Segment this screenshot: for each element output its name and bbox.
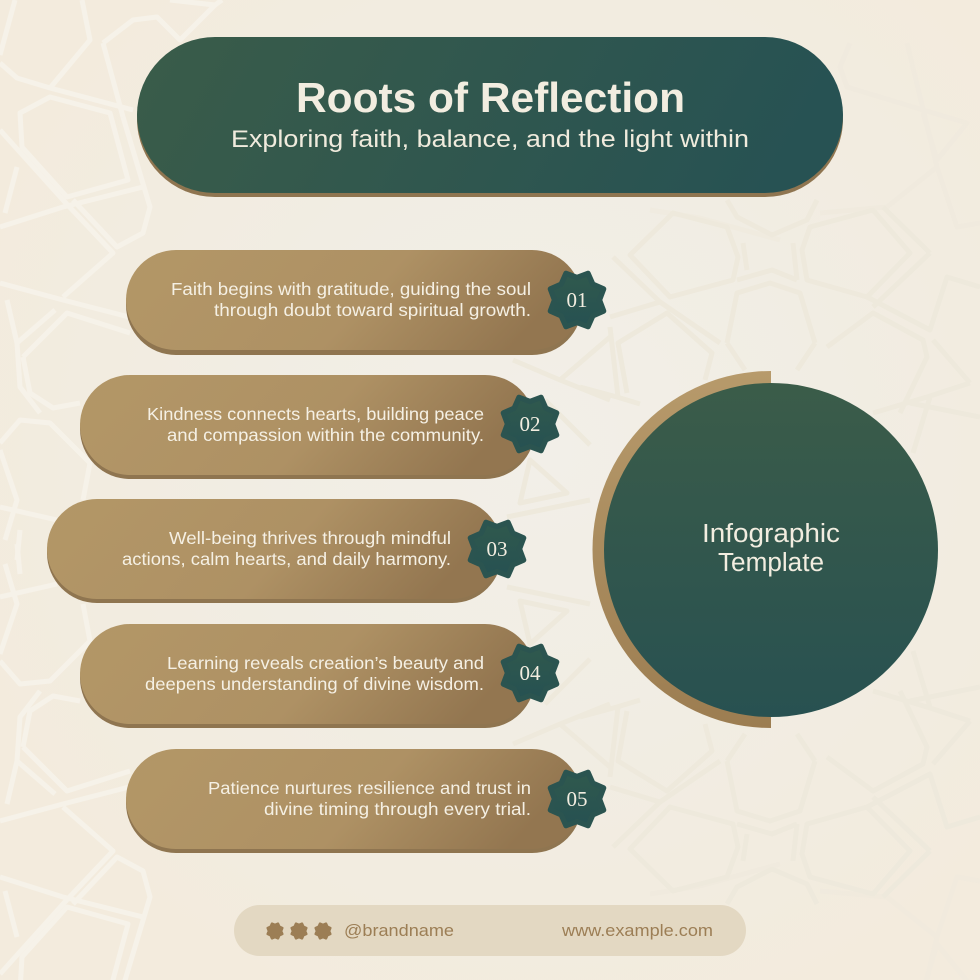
panel: item 01 [126, 250, 604, 355]
circle label: Template [718, 549, 824, 577]
text: item 03: actions, calm hearts, and daily harmony. [122, 549, 451, 569]
badge: 05 [550, 772, 604, 826]
subtitle: Exploring faith, balance, and the light within [231, 126, 749, 153]
circle label: Infographic [702, 520, 840, 548]
text: item 05: Patience nurtures resilience and trust in [208, 778, 531, 798]
panel: item 04 [80, 624, 557, 728]
badge: 05: 05 [566, 787, 588, 811]
badge: 03: 03 [486, 537, 508, 561]
title: Roots of Reflection [296, 74, 685, 121]
icon: footer star 1 [268, 924, 282, 938]
gold half ring [592, 371, 771, 728]
badge: 04: 04 [520, 661, 541, 685]
icon: footer star 2 [292, 924, 306, 938]
text: item 04: Learning reveals creation’s beauty and [167, 653, 484, 673]
header banner [137, 37, 843, 197]
central circle [592, 371, 938, 728]
panel: item 03 [47, 499, 524, 603]
badge: 01 [550, 273, 604, 327]
text: item 01: through doubt toward spiritual growth. [214, 300, 531, 320]
text: item 04: deepens understanding of divine wisdom. [145, 674, 484, 694]
brand handle: @brandname [344, 921, 454, 940]
text: item 02: and compassion within the community. [167, 425, 484, 445]
badge: 01: 01 [566, 288, 588, 312]
text: item 05: divine timing through every trial. [264, 799, 531, 819]
text: item 02: Kindness connects hearts, building peace [147, 404, 484, 424]
text: item 01: Faith begins with gratitude, guiding the soul [171, 279, 531, 299]
badge: 02: 02 [520, 412, 540, 436]
website: www.example.com [561, 921, 713, 940]
badge: 02 [503, 397, 557, 451]
panel: item 05 [126, 749, 604, 853]
icon: footer star 3 [316, 924, 330, 938]
footer bar [234, 905, 746, 956]
text: item 03: Well-being thrives through mindful [169, 528, 451, 548]
panel: item 02 [80, 375, 557, 479]
badge: 04 [503, 646, 557, 700]
badge: 03 [470, 522, 524, 576]
